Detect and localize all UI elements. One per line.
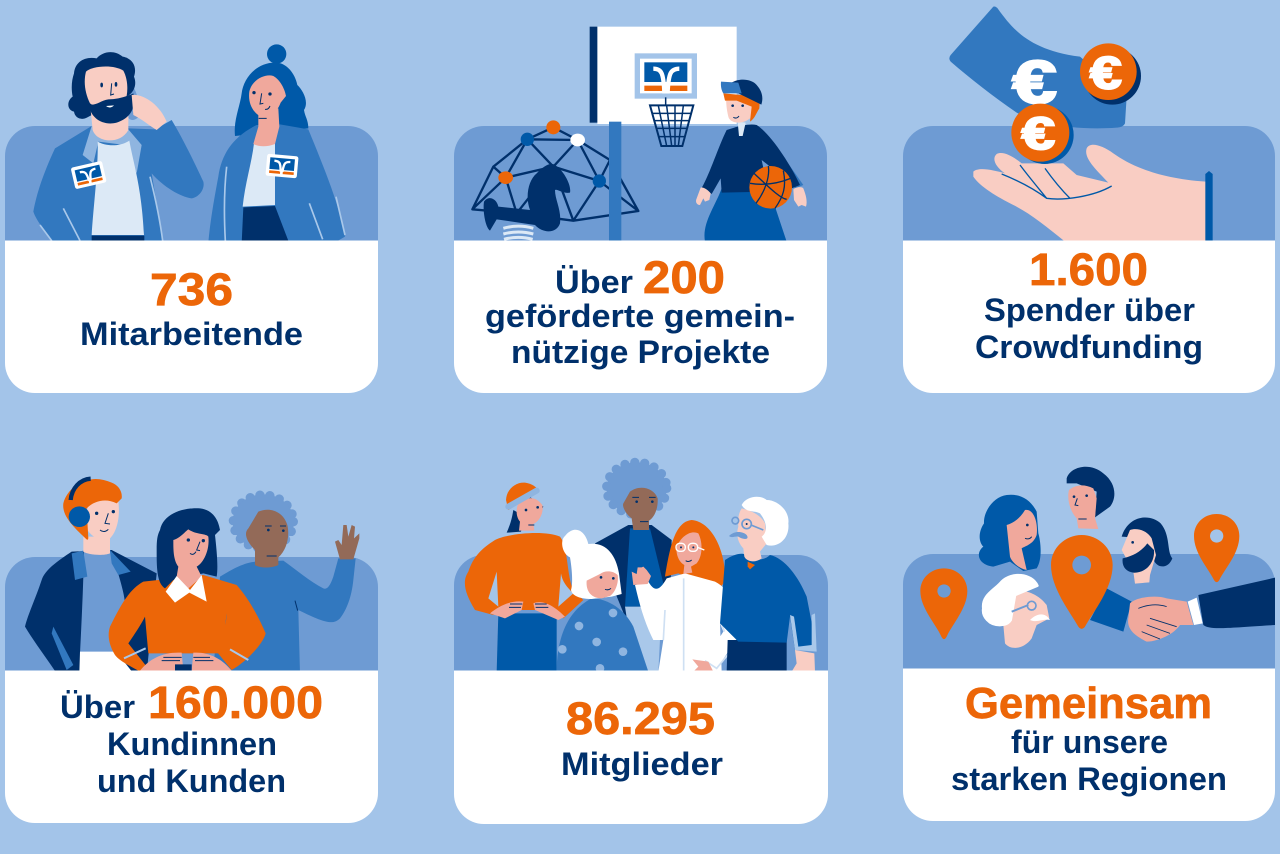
icon: name badge woman — [265, 154, 299, 178]
heading: Gemeinsam: Gemeinsam — [965, 679, 1212, 728]
panel: Gemeinsam für unsere starken Regionen — [903, 467, 1275, 821]
basketball backboard — [590, 27, 737, 124]
panel header background — [5, 126, 378, 241]
white text card — [454, 240, 827, 393]
label line: für unsere: für unsere — [1011, 724, 1168, 760]
illustration: two employees — [33, 44, 345, 243]
woman head — [979, 495, 1041, 571]
woman in white coat — [632, 520, 745, 672]
label line: und Kunden: und Kunden — [97, 763, 286, 799]
text: Über: Über — [60, 689, 135, 725]
coin lower — [1011, 104, 1074, 164]
pole — [609, 122, 621, 241]
panel: Mitarbeitende — [5, 44, 378, 393]
white text card — [903, 668, 1275, 821]
number: 200: 200 — [643, 252, 725, 303]
hand — [973, 145, 1213, 242]
panel header background — [454, 555, 828, 671]
text: Über: Über — [555, 264, 633, 300]
climbing dome — [472, 120, 638, 221]
white text card — [454, 670, 828, 824]
boy with basketball — [696, 80, 807, 242]
white text card — [903, 240, 1275, 393]
pin centre — [1051, 535, 1113, 629]
number: 160.000: 160.000 — [148, 677, 323, 728]
label: Mitglieder: Mitglieder — [561, 746, 723, 782]
coin lower: € — [1022, 108, 1055, 159]
person with afro — [595, 462, 672, 672]
basketball net — [650, 97, 693, 146]
person with headphones — [25, 479, 157, 673]
coin upper: € — [1090, 47, 1122, 98]
person with orange sweater and hat — [465, 483, 583, 672]
older man head — [983, 575, 1050, 648]
banknote: € — [1012, 49, 1057, 116]
illustration: playground and boy — [472, 80, 807, 242]
woman in orange sweater — [109, 508, 266, 672]
number: 736: 736 — [150, 264, 233, 315]
panel header background — [903, 126, 1275, 241]
illustration: heads, pins and handshake — [920, 467, 1275, 648]
panel: Crowdfunding — [903, 7, 1275, 393]
pin right — [1194, 514, 1239, 582]
banknote — [949, 7, 1127, 128]
white text card — [5, 670, 378, 823]
young man head — [1067, 467, 1114, 529]
panel: Kundinnen und Kunden — [5, 479, 378, 823]
panel header background — [454, 126, 827, 241]
older man with moustache — [720, 497, 817, 672]
label line: starken Regionen: starken Regionen — [951, 761, 1227, 797]
illustration: five members — [465, 462, 817, 673]
label line: Kundinnen: Kundinnen — [107, 726, 277, 762]
number: 1.600: 1.600 — [1029, 244, 1148, 295]
handshake — [1090, 578, 1275, 642]
number: 86.295: 86.295 — [566, 693, 715, 744]
label line: geförderte gemein-: geförderte gemein- — [485, 298, 795, 334]
panel header background — [903, 554, 1275, 669]
label line: Crowdfunding: Crowdfunding — [975, 329, 1203, 365]
panel: geförderte Projekte — [454, 27, 827, 393]
coin upper — [1080, 43, 1141, 105]
panel: Mitglieder — [454, 462, 828, 824]
illustration: three customers — [25, 479, 359, 673]
white text card — [5, 240, 378, 393]
person waving — [213, 494, 359, 673]
grandmother with polka dots — [557, 530, 648, 673]
label line: Spender über: Spender über — [984, 292, 1195, 328]
illustration: banknote, coins and hand — [949, 7, 1213, 242]
label line: nützige Projekte: nützige Projekte — [511, 334, 770, 370]
bearded man head — [1122, 517, 1172, 584]
pin left — [920, 568, 967, 639]
label: Mitarbeitende: Mitarbeitende — [80, 316, 303, 352]
icon: name badge man — [71, 161, 107, 189]
rocking horse — [484, 164, 570, 239]
panel header background — [5, 557, 378, 671]
